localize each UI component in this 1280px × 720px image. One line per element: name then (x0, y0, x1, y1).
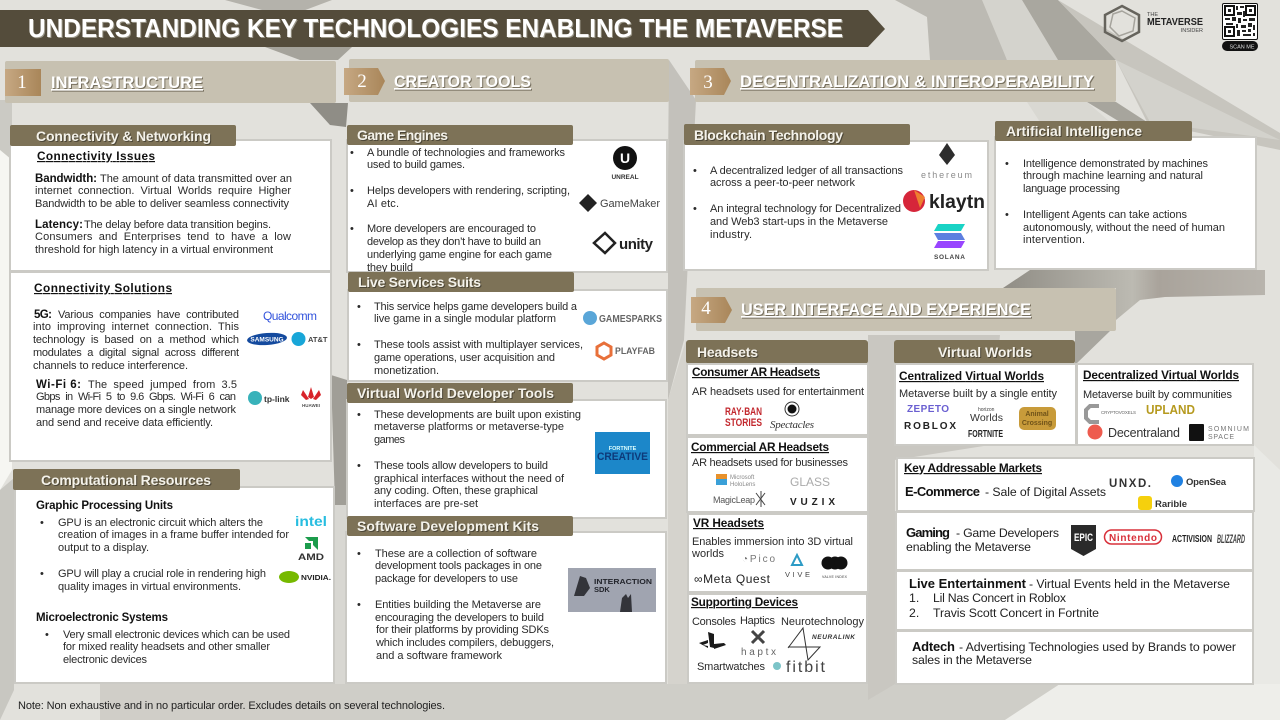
logo: roblox: ROBLOX (904, 421, 956, 432)
logo: somnium space: SPACE (1208, 434, 1234, 441)
image: interaction sdk: SDK (594, 585, 610, 594)
panel: vr headsets: worlds (691, 548, 724, 560)
tab: live services suits (348, 272, 574, 292)
tab: virtual world developer tools: Virtual World Developer Tools (357, 385, 554, 401)
text: latency: The delay before data transition begins. (84, 219, 271, 231)
panel: live entertainment: 1. (909, 591, 919, 605)
panel: supporting devices (688, 594, 867, 683)
logo: somnium space: SOMNIUM (1208, 426, 1249, 433)
tab: game engines: Game Engines (357, 127, 448, 143)
section 2 heading: Creator Tools: 2 (357, 71, 367, 92)
logo: rarible: Rarible (1155, 499, 1187, 510)
panel: commercial ar headsets: Commercial AR Headsets (691, 440, 829, 454)
panel: supporting devices: Haptics (740, 615, 776, 627)
image: interaction sdk: INTERACTION (594, 577, 652, 586)
logo: horizon worlds: horizon (978, 407, 995, 413)
text: blockchain bullets: industry. (710, 229, 752, 241)
tab: software development kits (347, 516, 573, 536)
logo: vive (785, 555, 810, 579)
text: wi-fi 6: manage more devices on a single network (36, 404, 236, 416)
text: blockchain bullets: and Web3 start-ups in the Metaverse (710, 216, 888, 228)
logo: huawei: HUAWEI (302, 403, 320, 408)
panel: vr headsets: Enables immersion into 3D virtual (692, 536, 853, 548)
text: latency: threshold for high latency in a virtual environment (35, 244, 273, 256)
panel: adtech (896, 631, 1253, 684)
text: latency (35, 219, 291, 256)
section 4 heading: User Interface and Experience: 4 (701, 298, 711, 319)
panel: adtech: Adtech (912, 639, 955, 654)
logo: samsung (247, 332, 287, 346)
logo: The Metaverse Insider: THE (1147, 12, 1158, 18)
panel: consumer ar headsets: Consumer AR Headsets (692, 365, 820, 379)
text: game engine bullets: • (350, 147, 354, 159)
logo: pico: ◔Pico (742, 554, 775, 565)
text: bandwidth: internet connection. Virtual Worlds require Higher (35, 185, 291, 197)
logo: horizon worlds: Worlds (970, 412, 1003, 424)
panel: vr headsets: VR Headsets (693, 516, 764, 530)
logo: cryptovoxels: CRYPTOVOXELS (1101, 410, 1136, 415)
text: virtual world bullets (357, 409, 581, 510)
text: blockchain bullets: • (693, 203, 697, 215)
text: microelectronic bullets: electronic devices (63, 654, 148, 666)
tab: headsets: Headsets (697, 344, 758, 360)
heading: graphic processing units: Graphic Processing Units (36, 500, 173, 512)
section 4 heading: User Interface and Experience (691, 288, 1116, 331)
logo: animal crossing: Crossing (1022, 420, 1052, 427)
logo: gamemaker (579, 194, 660, 212)
logo: unreal (611, 146, 639, 181)
logo: klaytn: klaytn (929, 192, 985, 213)
text: blockchain bullets: • (693, 165, 697, 177)
text: sdk bullets: • (357, 599, 361, 611)
text: game engine bullets: develop as they don’t have to build an (367, 236, 541, 248)
panel: gaming: Gaming (906, 525, 950, 540)
logo: qualcomm: Qualcomm (263, 309, 317, 323)
logo: amd: AMD (298, 552, 324, 563)
section 3 heading: Decentralization & Interoperability: DECENTRALIZATION & INTEROPERABILITY (740, 73, 1094, 91)
text: virtual world bullets: any coding. Often, these graphical (374, 485, 538, 497)
text: virtual world bullets: • (357, 409, 361, 421)
text: ai bullets: • (1005, 158, 1009, 170)
section 1 heading: Infrastructure: INFRASTRUCTURE (51, 74, 203, 92)
tab: virtual worlds: Virtual Worlds (938, 344, 1032, 360)
logo: animal crossing (1019, 407, 1056, 430)
text: game engine bullets: AI etc. (367, 198, 399, 210)
text: blockchain bullets: A decentralized ledger of all transactions (710, 165, 904, 177)
text: microelectronic bullets (45, 629, 290, 666)
logo: ray-ban stories: RAY·BAN (725, 406, 762, 418)
text: wi-fi 6: Gbps in Wi-Fi 5 to 9.6 Gbps. Wi-Fi 6 can (36, 391, 236, 403)
title banner: UNDERSTANDING KEY TECHNOLOGIES ENABLING THE METAVERSE (28, 13, 843, 43)
logo: solana (934, 224, 965, 261)
section 2 heading: Creator Tools (344, 59, 669, 102)
logo: valve index: VALVE INDEX (822, 575, 848, 579)
text: bandwidth: Bandwidth: (35, 173, 97, 185)
logo: amd (298, 537, 324, 563)
logo: unity: unity (619, 236, 654, 253)
logo: fitbit: fitbit (786, 659, 826, 676)
logo: microsoft hololens: HoloLens (730, 482, 755, 488)
logo: unreal: U (620, 150, 630, 166)
panel: game engines (347, 125, 667, 274)
heading: connectivity solutions: Connectivity Solutions (34, 281, 172, 295)
text: game engine bullets: they build (367, 262, 413, 274)
logo: zepeto: ZEPETO (907, 404, 949, 415)
panel: adtech: - Advertising Technologies used by Brands to power (959, 640, 1236, 654)
panel: centralized virtual worlds (895, 364, 1076, 445)
logo: activision blizzard: ACTIVISION (1172, 534, 1212, 545)
logo: at&t: AT&T (308, 335, 328, 344)
logo: haptx (741, 631, 776, 658)
logo: nvidia: NVIDIA. (301, 573, 331, 582)
text: ai bullets: • (1005, 209, 1009, 221)
text: game engine bullets: used to build games. (367, 159, 465, 171)
panel: supporting devices: Consoles (692, 616, 736, 628)
logo: spectacles (770, 402, 814, 431)
tab: headsets (686, 340, 868, 364)
logo: valve index (822, 556, 848, 579)
text: ai bullets: language processing (1023, 183, 1120, 195)
logo: nintendo: Nintendo (1109, 533, 1157, 544)
logo: unxd: UNXD. (1109, 478, 1151, 490)
tab: computational resources (13, 469, 240, 490)
panel: vr headsets (688, 514, 868, 592)
logo: epic games: EPIC (1074, 532, 1093, 544)
text: wi-fi 6: The speed jumped from 3.5 (88, 379, 237, 391)
logo: gamesparks (583, 311, 662, 325)
section 3 heading: Decentralization & Interoperability (690, 60, 1116, 102)
logo: ray-ban stories: STORIES (725, 417, 762, 429)
text: gpu bullets: • (40, 568, 44, 580)
text: game engine bullets: A bundle of technologies and frameworks (367, 147, 566, 159)
logo: The Metaverse Insider: INSIDER (1181, 28, 1203, 34)
logo: cryptovoxels (1086, 406, 1136, 422)
text: gpu bullets (40, 517, 289, 593)
logo: huawei (301, 387, 321, 408)
panel: decentralized virtual worlds: Metaverse built by communities (1083, 389, 1232, 401)
text: virtual world bullets: • (357, 460, 361, 472)
QR code (1222, 4, 1258, 51)
logo: epic games (1071, 525, 1096, 556)
heading: connectivity issues: Connectivity Issues (37, 149, 155, 163)
text: game engine bullets: More developers are encouraged to (367, 223, 536, 235)
heading: microelectronic systems: Microelectronic Systems (36, 612, 168, 624)
text: gpu bullets: • (40, 517, 44, 529)
text: sdk bullets: which includes compilers, debuggers, (375, 637, 554, 649)
logo: tp-link (248, 391, 290, 405)
logo: upland: UPLAND (1146, 402, 1195, 417)
logo: haptx: haptx (741, 647, 776, 658)
section 4 heading: User Interface and Experience: USER INTERFACE AND EXPERIENCE (741, 301, 1031, 319)
panel: decentralized virtual worlds: Decentralized Virtual Worlds (1083, 368, 1239, 382)
logo: activision blizzard (1172, 532, 1245, 546)
panel: key addressable markets / e-commerce: E-Commerce (905, 484, 980, 499)
panel: software development kits (346, 516, 666, 683)
text: blockchain bullets (693, 165, 904, 241)
logo: tp-link: tp-link (264, 394, 290, 404)
logo: ethereum: ethereum (921, 170, 972, 180)
text: sdk bullets: development tools packages in one (375, 560, 542, 572)
text: gpu bullets: GPU is an electronic circuit which alters the (58, 517, 263, 529)
image: interaction sdk (568, 568, 656, 612)
text: bandwidth: Bandwidth to be able to deliver seamless connectivity (35, 198, 290, 210)
text: 5G: Various companies have contributed (58, 309, 239, 321)
logo: samsung: SAMSUNG (250, 336, 284, 344)
logo: nintendo (1104, 530, 1162, 544)
text: latency: Consumers and Enterprises tend to have a low (35, 231, 291, 243)
tab: live services suits: Live Services Suits (358, 274, 481, 290)
tab: game engines (347, 125, 573, 145)
panel: virtual world developer tools (347, 383, 666, 518)
text: wi-fi 6 (36, 379, 237, 429)
text: virtual world bullets: graphical interfaces without the need of (374, 473, 565, 485)
tab: blockchain technology: Blockchain Technology (694, 127, 843, 143)
panel: key addressable markets / e-commerce: - Sale of Digital Assets (985, 485, 1106, 499)
panel: commercial ar headsets (687, 437, 868, 512)
text: game engine bullets: underlying game engine for each game (367, 249, 552, 261)
text: microelectronic bullets: for mixed reality headsets and other smaller (63, 641, 270, 653)
logo: rarible (1138, 496, 1187, 510)
text: live services bullets: • (357, 339, 361, 351)
text: game engine bullets: • (350, 223, 354, 235)
logo: magic leap (713, 491, 765, 507)
text: ai bullets (1005, 158, 1225, 246)
panel: live entertainment: - Virtual Events held in the Metaverse (1029, 577, 1230, 591)
text: gpu bullets: GPU will play a crucial role in rendering high (58, 568, 266, 580)
logo: ray-ban stories (725, 406, 762, 429)
text: live services bullets: game operations, user acquisition and (374, 352, 555, 364)
logo: unity (594, 233, 654, 253)
text: sdk bullets: • (357, 548, 361, 560)
tab: artificial intelligence (995, 121, 1192, 141)
logo: playfab (597, 343, 655, 359)
text: game engine bullets: Helps developers with rendering, scripting, (367, 185, 570, 197)
text: ai bullets: intervention. (1023, 234, 1085, 246)
QR code: SCAN ME (1229, 44, 1255, 50)
logo: klaytn (903, 190, 985, 213)
text: live services bullets: live game in a single modular platform (374, 313, 556, 325)
text: sdk bullets: These are a collection of software (375, 548, 537, 560)
logo: vive: VIVE (785, 570, 810, 579)
tab: virtual world developer tools (347, 383, 573, 403)
logo: The Metaverse Insider (1105, 6, 1203, 41)
panel: commercial ar headsets: AR headsets used for businesses (692, 457, 848, 469)
section 1 heading: Infrastructure: 1 (17, 72, 27, 93)
text: 5G: modulates a digital signal across different (33, 347, 239, 359)
logo: at&t (292, 332, 328, 346)
text: blockchain bullets: across a peer-to-peer network (710, 177, 856, 189)
panel: computational resources (13, 469, 334, 683)
text: wi-fi 6: and send and receive data efficiently. (36, 417, 213, 429)
text: 5G: into improving internet connection. This (33, 321, 240, 333)
text: bandwidth: The amount of data transmitted over an (100, 173, 292, 185)
panel: supporting devices: Smartwatches (697, 661, 766, 673)
logo: opensea (1171, 475, 1227, 488)
tab: virtual worlds (894, 340, 1075, 364)
panel: live entertainment: 2. (909, 606, 919, 620)
logo: neuralink (788, 628, 856, 660)
logo: glass: GLASS (790, 475, 830, 489)
panel: artificial intelligence (995, 121, 1256, 269)
logo: decentraland: Decentraland (1108, 426, 1180, 440)
logo: opensea: OpenSea (1186, 477, 1227, 488)
text: virtual world bullets: interfaces are pre-set (374, 498, 478, 510)
panel: centralized virtual worlds: Metaverse built by a single entity (899, 388, 1058, 400)
text: sdk bullets: Entities building the Metaverse are (375, 599, 541, 611)
panel: live entertainment: Live Entertainment (909, 576, 1027, 591)
text: virtual world bullets: These developments are built upon existing (374, 409, 581, 421)
tab: software development kits: Software Development Kits (357, 518, 539, 534)
footnote: Note: Non exhaustive and in no particular order. Excludes details on several technologies. (18, 700, 445, 712)
text: ai bullets: through machine learning and natural (1023, 170, 1203, 182)
panel: live entertainment (896, 571, 1253, 630)
text: 5G: channels to reduce interference. (33, 360, 188, 372)
text: sdk bullets (357, 548, 554, 662)
logo: fortnite: FORTNITE (968, 429, 1003, 440)
panel: key addressable markets / e-commerce (897, 458, 1254, 511)
panel: gaming (896, 512, 1253, 570)
section 2 heading: Creator Tools: CREATOR TOOLS (394, 73, 531, 91)
text: sdk bullets: and a software framework (376, 650, 502, 662)
text: microelectronic bullets: • (45, 629, 49, 641)
panel: centralized virtual worlds: Centralized Virtual Worlds (899, 369, 1044, 383)
text: ai bullets: Intelligent Agents can take actions (1023, 209, 1188, 221)
logo: fortnite creative: FORTNITE (609, 446, 637, 452)
logo: fortnite creative: CREATIVE (597, 451, 648, 463)
logo: meta quest: ∞Meta Quest (694, 572, 771, 586)
logo: gamemaker: GameMaker (600, 198, 660, 210)
section 3 heading: Decentralization & Interoperability: 3 (703, 72, 713, 93)
panel: decentralized virtual worlds (1077, 364, 1253, 445)
text: game engine bullets (350, 147, 570, 274)
logo: unreal: UNREAL (611, 174, 639, 181)
panel: connectivity solutions (10, 272, 331, 461)
panel: live services suits (348, 272, 667, 381)
tab: computational resources: Computational Resources (41, 472, 211, 488)
panel: supporting devices: Neurotechnology (781, 616, 864, 628)
logo: The Metaverse Insider: METAVERSE (1147, 17, 1203, 28)
tab: blockchain technology (684, 124, 910, 145)
section 1 heading: Infrastructure (5, 61, 336, 103)
text: game engine bullets: • (350, 185, 354, 197)
panel: adtech: sales in the Metaverse (912, 653, 1032, 667)
text: live services bullets (357, 301, 583, 377)
text: 5G (33, 309, 240, 372)
text: bandwidth (35, 173, 292, 210)
text: blockchain bullets: An integral technology for Decentralized (710, 203, 901, 215)
text: live services bullets: • (357, 301, 361, 313)
logo: ethereum (921, 143, 972, 180)
panel: live entertainment: Travis Scott Concert in Fortnite (933, 606, 1099, 620)
logo: neuralink: NEURALINK (812, 634, 856, 641)
panel: gaming: BLIZZARD (1217, 532, 1245, 546)
text: microelectronic bullets: Very small electronic devices which can be used (63, 629, 290, 641)
logo: magic leap: MagicLeap (713, 495, 755, 505)
text: 5G: 5G: (34, 309, 52, 321)
panel: supporting devices: Supporting Devices (691, 595, 798, 609)
logo: spectacles: Spectacles (770, 419, 814, 431)
panel: live entertainment: Lil Nas Concert in Roblox (933, 591, 1067, 605)
panel: connectivity issues (10, 125, 331, 271)
logo: playstation (699, 632, 726, 649)
panel: consumer ar headsets: AR headsets used for entertainment (692, 386, 864, 398)
logo: fortnite creative (595, 432, 650, 474)
text: sdk bullets: package for developers to use (375, 573, 518, 585)
tab: artificial intelligence: Artificial Intelligence (1006, 123, 1142, 139)
text: ai bullets: Intelligence demonstrated by machines (1023, 158, 1208, 170)
text: live services bullets: This service helps game developers build a (374, 301, 578, 313)
logo: microsoft hololens: Microsoft (730, 475, 755, 481)
logo: nvidia (279, 571, 331, 583)
logo: intel: intel (295, 513, 327, 529)
text: live services bullets: These tools assist with multiplayer services, (374, 339, 583, 351)
text: sdk bullets: encouraging the developers to build (375, 612, 544, 624)
panel: gaming: enabling the Metaverse (906, 540, 1031, 554)
text: ai bullets: autonomously, without the need of human (1023, 222, 1225, 234)
logo: solana: SOLANA (934, 254, 965, 261)
text: gpu bullets: creation of images in a frame buffer intended for (58, 529, 289, 541)
text: wi-fi 6: Wi-Fi 6: (36, 379, 81, 391)
panel: blockchain technology (684, 124, 988, 270)
logo: vuzix: VUZIX (790, 497, 835, 508)
text: live services bullets: monetization. (374, 365, 439, 377)
text: virtual world bullets: games (374, 434, 406, 446)
logo: gamesparks: GAMESPARKS (599, 314, 662, 325)
text: gpu bullets: quality images in virtual environments. (58, 581, 241, 593)
panel: key addressable markets / e-commerce: Key Addressable Markets (904, 461, 1042, 475)
text: gpu bullets: output to a display. (58, 542, 149, 554)
logo: somnium space (1189, 424, 1249, 441)
text: sdk bullets: for their platforms by providing SDKs (376, 624, 550, 636)
text: virtual world bullets: metaverse platforms or metaverse-type (374, 421, 564, 433)
logo: playfab: PLAYFAB (615, 346, 655, 357)
panel: consumer ar headsets (687, 364, 868, 435)
text: virtual world bullets: These tools allow developers to build (374, 460, 548, 472)
logo: microsoft hololens (716, 474, 755, 488)
logo: animal crossing: Animal (1025, 411, 1049, 418)
text: latency: Latency: (35, 219, 83, 231)
panel: gaming: - Game Developers (956, 526, 1059, 540)
text: 5G: technology is based on a method which (33, 334, 239, 346)
tab: connectivity and networking: Connectivity & Networking (36, 128, 211, 144)
tab: connectivity and networking (10, 125, 236, 146)
